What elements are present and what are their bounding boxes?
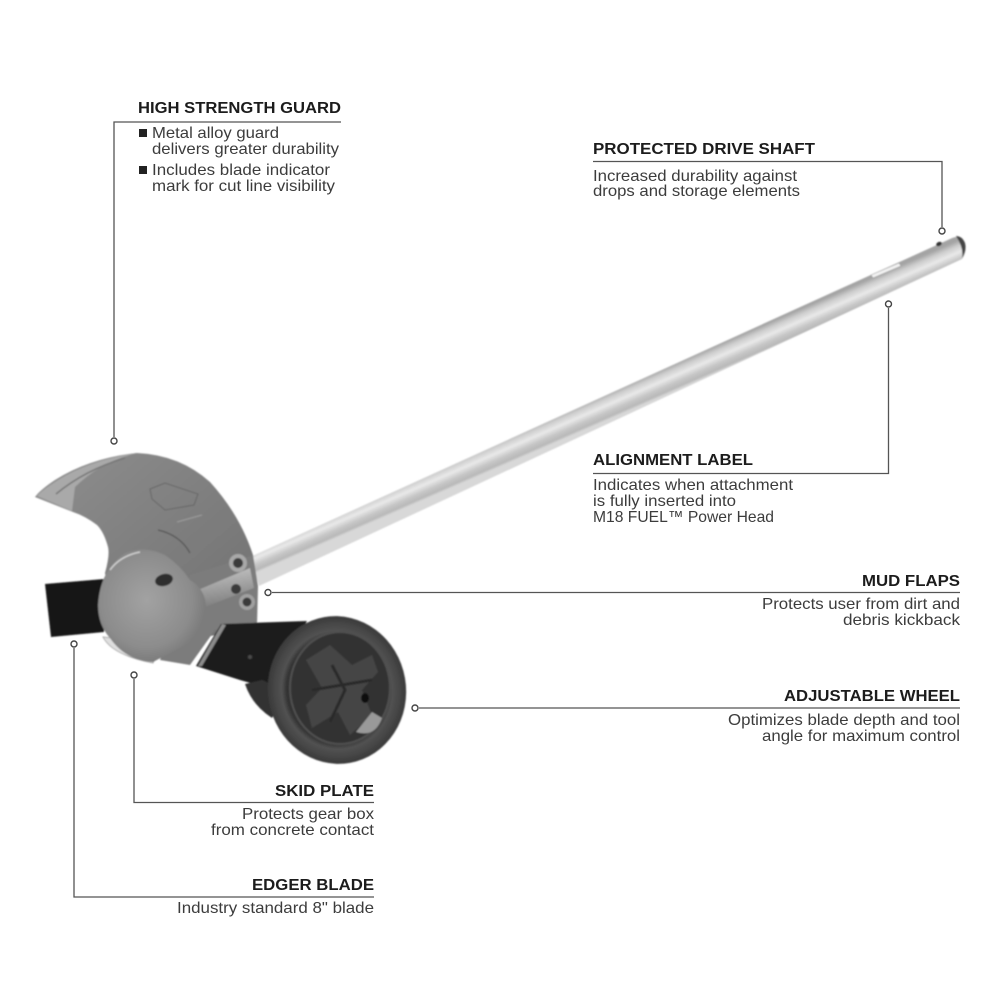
skid plate bbox=[103, 637, 155, 663]
callout: skid plate: from concrete contact bbox=[211, 822, 375, 839]
callout: adjustable wheel bbox=[412, 688, 960, 745]
callout: skid plate bbox=[131, 672, 375, 839]
callout: alignment label: M18 FUEL™ Power Head bbox=[593, 509, 774, 526]
callout: high strength guard: Metal alloy guard bbox=[152, 125, 279, 142]
alignment label on shaft bbox=[871, 263, 901, 278]
callout: high strength guard: mark for cut line visibility bbox=[152, 178, 335, 195]
drive shaft bbox=[250, 236, 966, 586]
callout: protected drive shaft: drops and storage elements bbox=[593, 183, 800, 200]
callout: high strength guard: HIGH STRENGTH GUARD bbox=[138, 100, 341, 117]
callout: adjustable wheel: Optimizes blade depth and tool bbox=[728, 712, 960, 729]
callout: high strength guard: delivers greater durability bbox=[152, 141, 339, 158]
callout: protected drive shaft bbox=[593, 141, 945, 234]
callout: adjustable wheel: ADJUSTABLE WHEEL bbox=[784, 688, 960, 705]
callout: high strength guard: Includes blade indicator bbox=[152, 162, 331, 179]
wheel bracket bbox=[196, 621, 307, 688]
callout: skid plate: Protects gear box bbox=[242, 806, 374, 823]
callout: alignment label bbox=[593, 301, 892, 526]
callout: mud flaps bbox=[265, 573, 961, 629]
callout: edger blade: Industry standard 8" blade bbox=[177, 900, 374, 917]
callout: alignment label: Indicates when attachment bbox=[593, 477, 794, 494]
callout: mud flaps: MUD FLAPS bbox=[862, 573, 960, 590]
callout: alignment label: ALIGNMENT LABEL bbox=[593, 452, 753, 469]
callout: protected drive shaft: PROTECTED DRIVE SHAFT bbox=[593, 141, 815, 158]
callout: skid plate: SKID PLATE bbox=[275, 783, 374, 800]
callout: edger blade bbox=[71, 641, 374, 917]
gear box bbox=[98, 549, 206, 662]
callout: high strength guard bbox=[111, 100, 341, 444]
callout: edger blade: EDGER BLADE bbox=[252, 877, 374, 894]
mounting plate and bolts bbox=[160, 554, 258, 665]
callout: mud flaps: debris kickback bbox=[843, 612, 961, 629]
edger blade bbox=[45, 579, 104, 637]
callout: mud flaps: Protects user from dirt and bbox=[762, 596, 960, 613]
high strength guard bbox=[35, 453, 257, 640]
illustration: edger attachment tool bbox=[35, 236, 966, 775]
callout: protected drive shaft: Increased durability against bbox=[593, 168, 798, 185]
callout: alignment label: is fully inserted into bbox=[593, 493, 736, 510]
adjustable wheel bbox=[245, 605, 418, 775]
callout: adjustable wheel: angle for maximum control bbox=[762, 728, 960, 745]
